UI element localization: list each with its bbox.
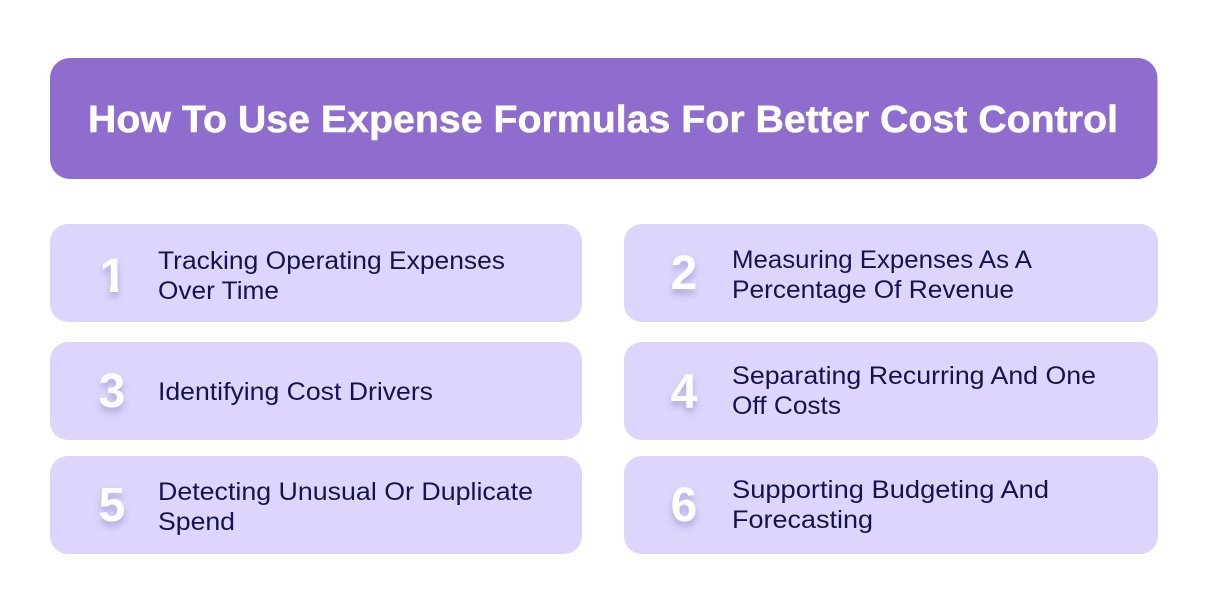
title: How To Use Expense Formulas For Better Cost Control <box>88 99 1118 141</box>
text: item 1: Over Time <box>158 277 279 305</box>
text: item 4: Off Costs <box>732 392 841 420</box>
text: item 4 <box>732 362 1096 420</box>
text: item 6 <box>732 476 1049 534</box>
number 2: 2 <box>671 247 697 300</box>
panel: item 5 <box>50 456 582 554</box>
panel: item 1 <box>50 224 582 322</box>
text: item 1 <box>158 247 505 305</box>
number 5: 5 <box>99 479 125 532</box>
text: item 5: Detecting Unusual Or Duplicate <box>158 478 533 506</box>
text: item 3: Identifying Cost Drivers <box>158 378 433 406</box>
text: item 1: Tracking Operating Expenses <box>158 247 505 275</box>
text: item 6: Supporting Budgeting And <box>732 476 1049 504</box>
text: item 5 <box>158 478 533 536</box>
number 6: 6 <box>671 479 697 532</box>
text: item 5: Spend <box>158 508 235 536</box>
text: item 2: Percentage Of Revenue <box>732 276 1014 304</box>
text: item 4: Separating Recurring And One <box>732 362 1096 390</box>
panel: title banner <box>50 58 1158 179</box>
number 1: 1 <box>100 250 126 303</box>
panel: item 6 <box>624 456 1158 554</box>
panel: item 3 <box>50 342 582 440</box>
panel: item 2 <box>624 224 1158 322</box>
text: item 6: Forecasting <box>732 506 873 534</box>
panel: item 4 <box>624 342 1158 440</box>
text: item 2: Measuring Expenses As A <box>732 246 1032 274</box>
number 4: 4 <box>671 366 698 419</box>
number 3: 3 <box>99 365 125 418</box>
text: item 2 <box>732 246 1032 304</box>
